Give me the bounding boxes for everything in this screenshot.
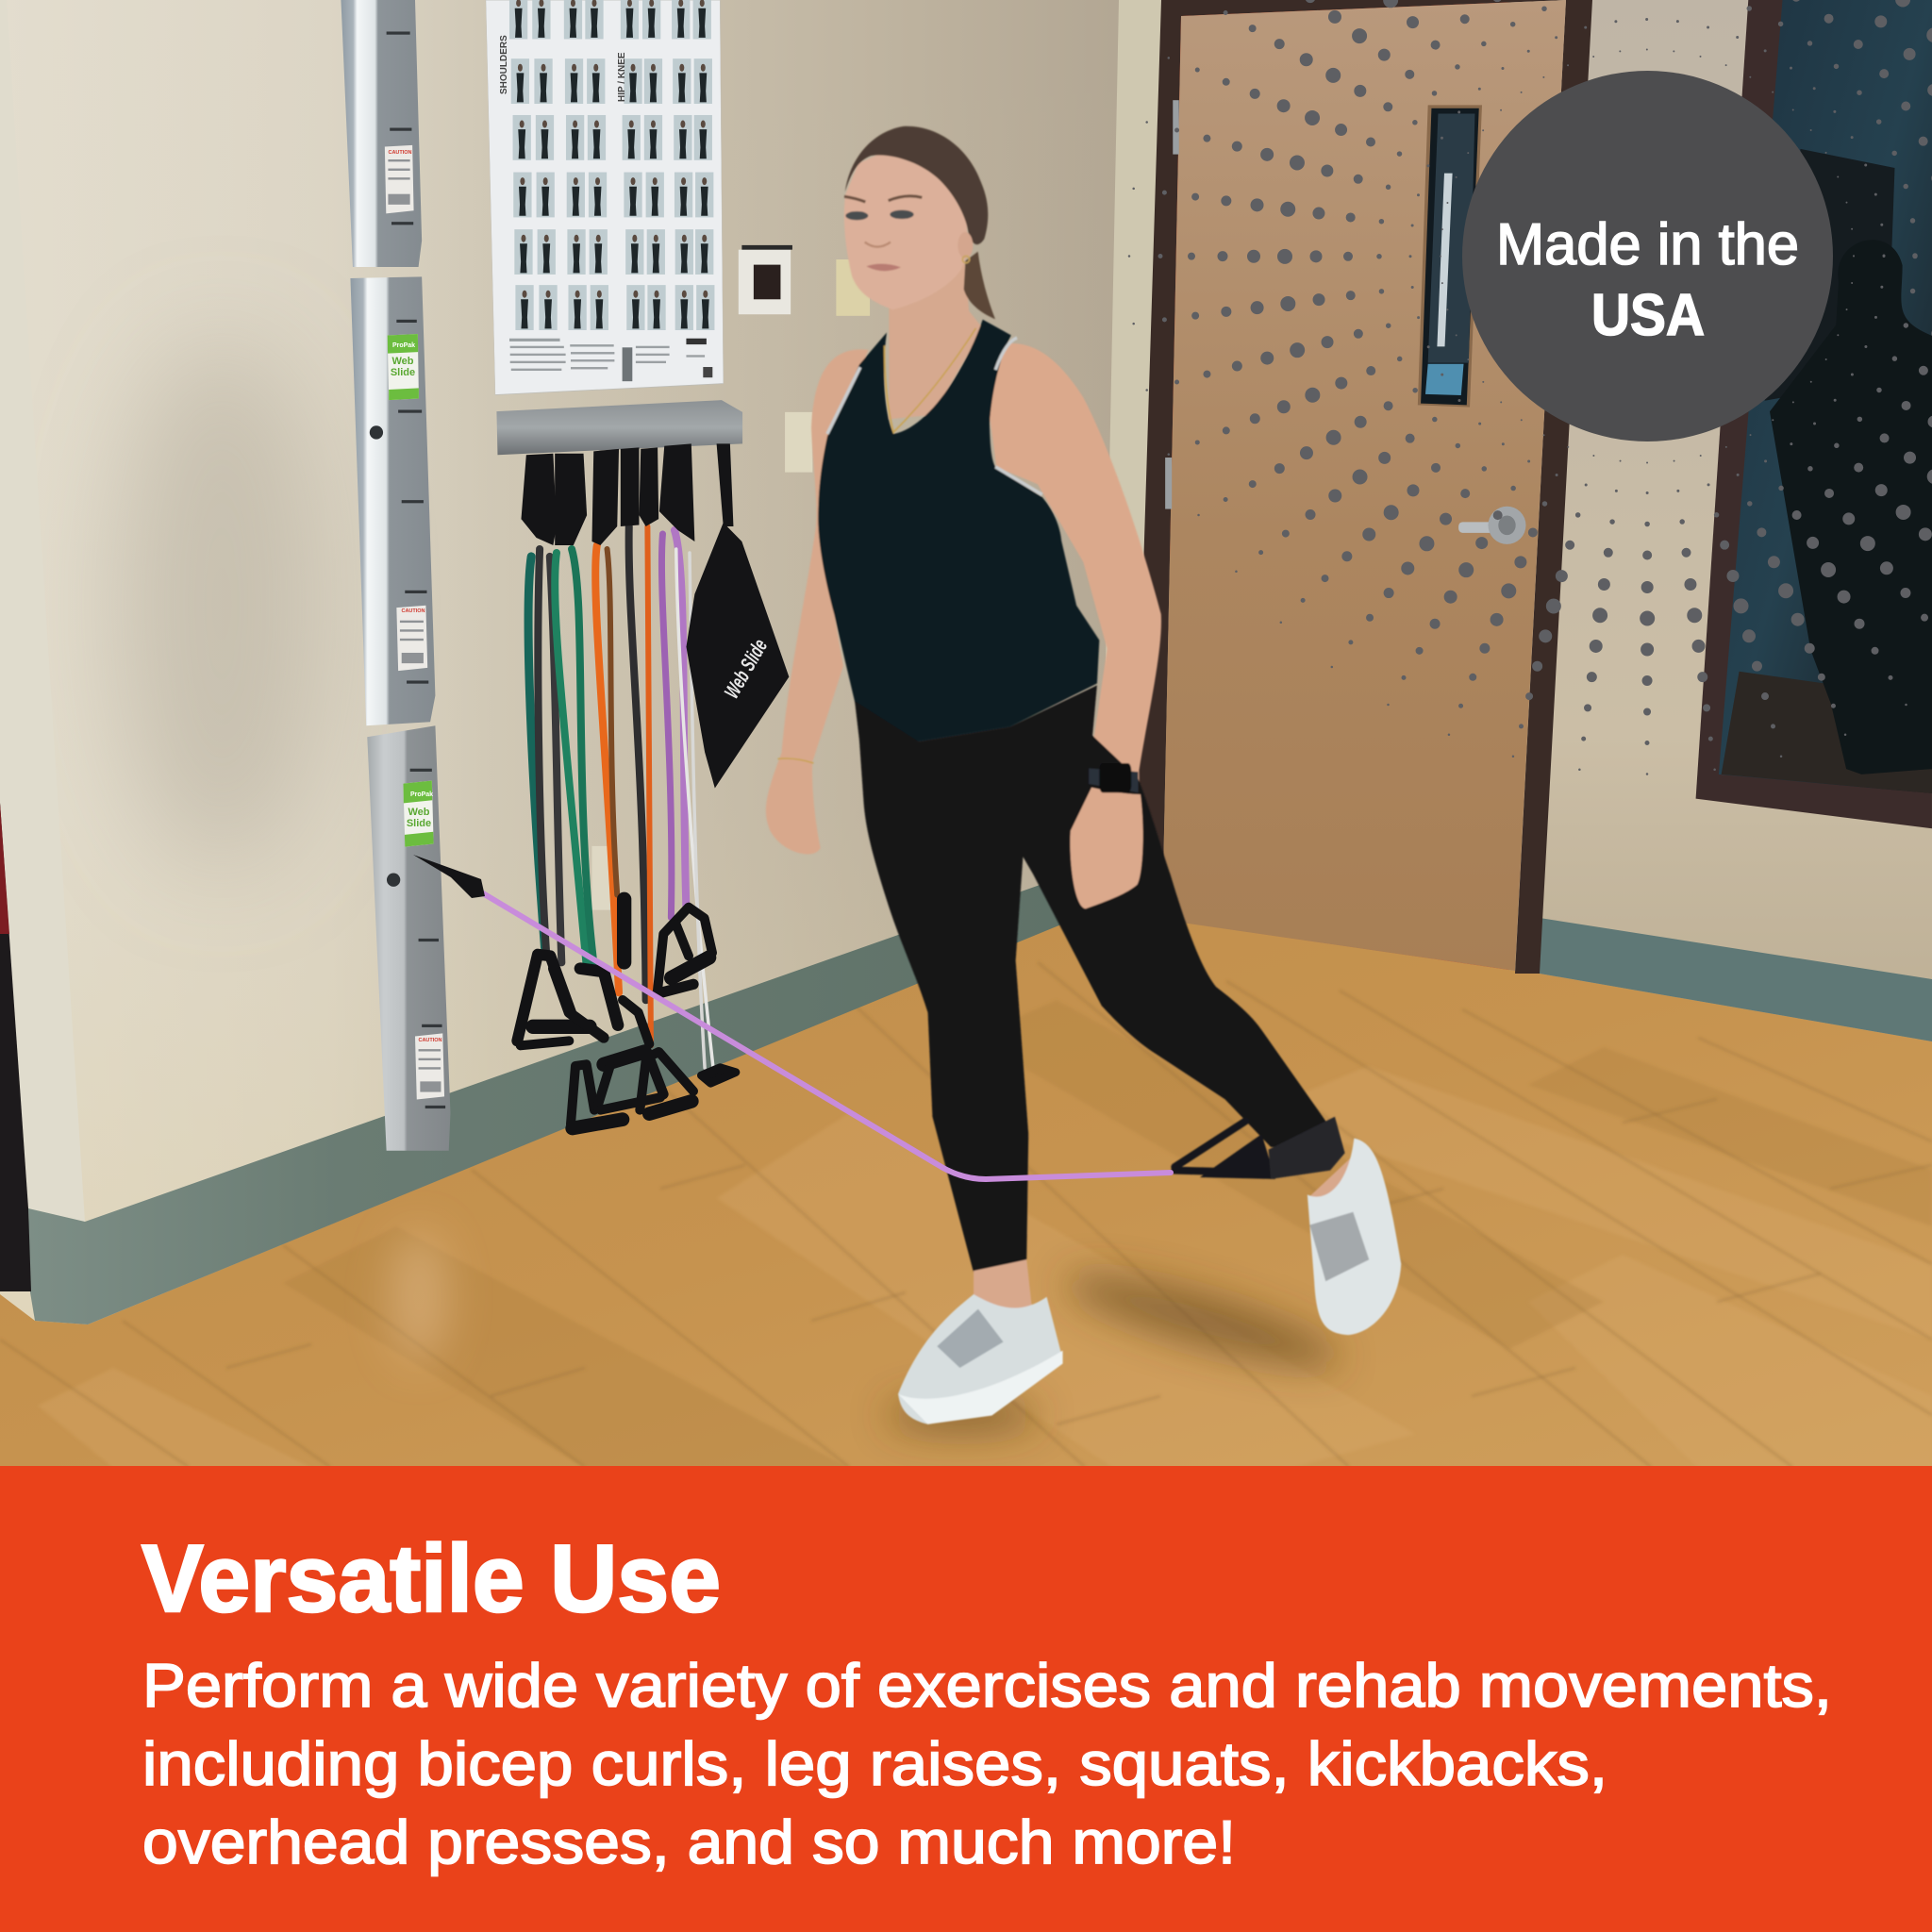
dark weights at left edge [0, 803, 31, 1291]
metal wall tracks [341, 0, 450, 1151]
mouth [866, 264, 901, 271]
raised shoe laces [1309, 1212, 1369, 1281]
arm left [766, 349, 869, 854]
smart watch [1089, 769, 1139, 792]
track label text: Web [391, 356, 414, 367]
person doing leg kickback [766, 126, 1401, 1424]
neck and shoulders [889, 258, 983, 419]
mirror [1696, 0, 1932, 828]
eyes [845, 210, 914, 220]
black band straps [521, 443, 694, 545]
wall corner strip left [0, 0, 85, 1222]
standing shoe [898, 1294, 1063, 1424]
door window and hardware [1165, 100, 1525, 544]
baseboard left [28, 877, 1061, 1324]
standing shoe laces [937, 1309, 1004, 1368]
raised ankle [1309, 1156, 1360, 1204]
earring [962, 256, 970, 263]
standing shoe sole [898, 1351, 1063, 1424]
mirror reflection of person [1770, 240, 1932, 774]
wall strip beside door [1104, 0, 1162, 802]
baseboard right [1540, 918, 1932, 1041]
hand [1070, 788, 1143, 908]
drawstring bag [686, 523, 789, 788]
plank tones [38, 1066, 1932, 1468]
raised shoe [1307, 1139, 1401, 1335]
ponytail [964, 252, 995, 319]
thermostat and wall switches [591, 245, 870, 910]
handles [517, 899, 736, 1128]
poster section labels [499, 35, 627, 102]
badge: Made in the USA: USA [1591, 283, 1705, 348]
head [844, 126, 995, 319]
body text: including bicep curls, leg raises, squats, kickbacks, [142, 1729, 1607, 1798]
ear [958, 232, 973, 258]
hair [845, 126, 988, 244]
tank top [818, 320, 1099, 741]
track label text: Web [408, 807, 430, 818]
necklace and bracelet [778, 328, 975, 763]
purple resistance band [483, 893, 1171, 1179]
wall-mounted exercise poster [486, 0, 724, 395]
poster instruction lines [509, 339, 712, 381]
badge text: Made in the [1496, 212, 1799, 277]
track label text [388, 150, 442, 1043]
track label text: CAUTION [418, 1038, 442, 1043]
back wall right of door [1509, 0, 1932, 1047]
poster thumbnails [509, 0, 714, 330]
photo background: room [0, 0, 1932, 1468]
bands [528, 526, 713, 1068]
eyebrows [844, 196, 922, 202]
soft shadow on wall [118, 340, 325, 868]
leggings [855, 685, 1335, 1273]
body text: overhead presses, and so much more! [142, 1807, 1236, 1876]
plank joints [0, 962, 1932, 1467]
door [1132, 0, 1592, 974]
bag strap [717, 443, 733, 526]
bag logo: Web Slide [720, 635, 772, 702]
track label text: Slide [391, 367, 415, 378]
track label text: Slide [407, 818, 431, 829]
orange text panel [0, 1466, 1932, 1932]
poster section labels: HIP / KNEE [617, 52, 627, 102]
warm lower wall tint [0, 0, 1170, 1340]
nose shadow [865, 242, 891, 247]
ankle strap [1174, 1117, 1345, 1179]
poster section labels: SHOULDERS [499, 35, 509, 94]
badge: Made in the USA [1462, 71, 1833, 441]
ankle standing leg [974, 1259, 1033, 1318]
track label text: ProPak [410, 791, 433, 798]
track label text: CAUTION [401, 608, 425, 614]
left wall [0, 0, 1170, 1340]
track label text: ProPak [392, 342, 415, 349]
face [844, 148, 969, 309]
arm right [990, 343, 1161, 908]
heading: Versatile Use [142, 1526, 721, 1632]
tank trim [827, 338, 1042, 494]
floor shadow [887, 1258, 1345, 1432]
body text: Perform a wide variety of exercises and rehab movements, [142, 1651, 1832, 1720]
decorative radial dot pattern around badge [1129, 0, 1932, 774]
hook bar [496, 400, 742, 455]
body text [142, 1651, 1832, 1876]
hanging resistance bands rack [496, 400, 789, 1128]
floor reflection [391, 1231, 447, 1363]
door anchor strap [413, 855, 485, 898]
track label text: CAUTION [388, 150, 412, 156]
floor [0, 920, 1932, 1468]
